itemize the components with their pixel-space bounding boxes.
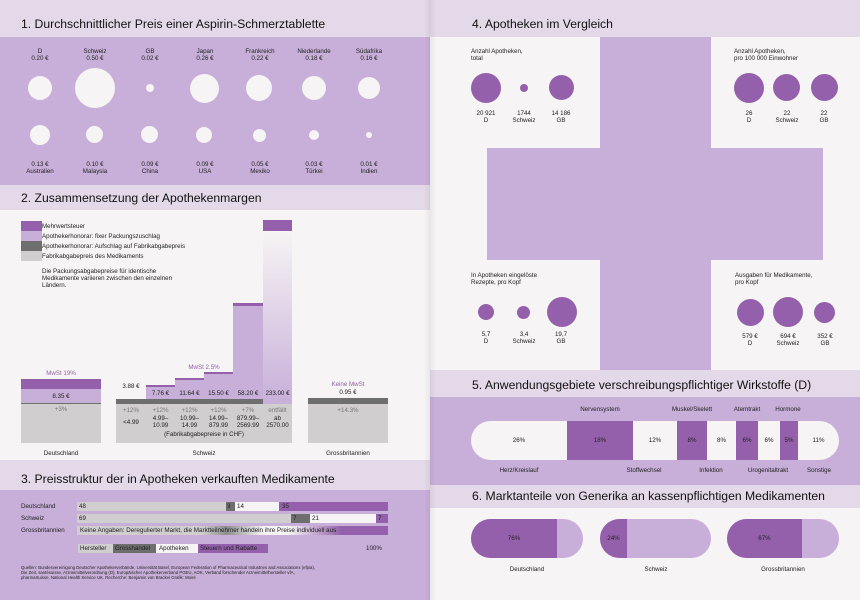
bar: Schweiz: 879.99 [209, 422, 228, 429]
bar: Deutschland: +3% [55, 406, 67, 413]
chart: aspirin prices: 0.05 € [251, 161, 269, 168]
title 3: 3. Preisstruktur der in Apotheken verkauften Medikamente [21, 472, 335, 486]
panel: Rezepte pro Kopf: 5,7 [482, 331, 490, 338]
chart: aspirin prices: 0.09 € [196, 161, 214, 168]
chart: aspirin prices: 0.50 € [86, 55, 104, 62]
bar: Deutschland: 8.35 € [52, 393, 70, 400]
title 2: 2. Zusammensetzung der Apothekenmargen [21, 191, 262, 205]
bar: Schweiz: 14.99 [182, 422, 197, 429]
chart: generics pills: Schweiz [644, 566, 668, 573]
chart: aspirin prices: Schweiz [83, 48, 107, 55]
bar: Schweiz: 4.99– [153, 415, 168, 422]
chart: application areas pill: 18% [594, 437, 606, 444]
chart: price structure: Steuern und Rabatte [200, 545, 257, 552]
panel: Ausgaben pro Kopf: Ausgaben für Medikamente, [735, 272, 812, 279]
chart: aspirin prices: 0.09 € [141, 161, 159, 168]
panel: Rezepte pro Kopf: D [484, 338, 488, 345]
panel: Ausgaben pro Kopf: 579 € [742, 333, 758, 340]
chart: application areas pill: Atemtrakt [734, 406, 760, 413]
bar: Grossbritannien: +14.3% [337, 407, 359, 414]
chart: aspirin prices [26, 48, 382, 175]
bar: Schweiz: 15.50 € [208, 390, 229, 397]
chart: aspirin prices: 0.03 € [305, 161, 323, 168]
bar: Schweiz: 58.20 € [238, 390, 258, 397]
title 1: 1. Durchschnittlicher Preis einer Aspirin-Schmerztablette [21, 17, 325, 31]
panel: Anzahl Apotheken total: GB [557, 117, 565, 124]
chart: aspirin prices: Indien [361, 168, 377, 175]
chart: application areas pill: Hormone [775, 406, 801, 413]
panel: Rezepte pro Kopf: Rezepte, pro Kopf [471, 279, 521, 286]
bar: Schweiz: +12% [210, 407, 226, 414]
bar: Schweiz: (Fabrikabgabepreise in CHF) [164, 431, 244, 438]
chart: aspirin prices: 0.26 € [196, 55, 214, 62]
bar: Schweiz: +12% [123, 407, 139, 414]
chart: price structure: Keine Angaben: Deregulierter Markt, die Marktteilnehmer handeln ihre Preise individuell aus [80, 527, 336, 534]
chart: price structure [21, 502, 388, 553]
chart: aspirin prices: GB [146, 48, 154, 55]
chart: generics pills: Grossbritannien [761, 566, 805, 573]
panel: Rezepte pro Kopf: 19,7 [555, 331, 567, 338]
panel: Rezepte pro Kopf: 3,4 [520, 331, 528, 338]
panel: Ausgaben pro Kopf: D [748, 340, 752, 347]
panel: Ausgaben pro Kopf: GB [821, 340, 829, 347]
title 5: 5. Anwendungsgebiete verschreibungspflichtiger Wirkstoffe (D) [472, 378, 811, 392]
chart: application areas pill: 12% [649, 437, 661, 444]
panel: pro 100000 Einwohner: D [747, 117, 751, 124]
chart: price structure: Schweiz [21, 515, 44, 522]
bar: Grossbritannien: 0.95 € [339, 389, 357, 396]
chart: aspirin prices: Australien [26, 168, 54, 175]
panel: pro 100000 Einwohner: 26 [746, 110, 752, 117]
chart: price structure: 100% [366, 545, 382, 552]
chart: application areas pill: Muskel/Skelett [672, 406, 712, 413]
chart: aspirin prices: Türkei [305, 168, 323, 175]
chart: price structure: Hersteller [80, 545, 106, 552]
chart: price structure: 69 [79, 515, 86, 522]
bar: Schweiz: 10.99 [153, 422, 168, 429]
panel: Rezepte pro Kopf: In Apotheken eingelöste [471, 272, 537, 279]
chart: price structure: Grosshandel [115, 545, 150, 552]
chart: aspirin prices: China [142, 168, 158, 175]
bar: Schweiz: Schweiz [192, 450, 216, 457]
panel: Rezepte pro Kopf: Schweiz [512, 338, 536, 345]
legend: margins: Medikamente variieren zwischen den einzelnen [42, 275, 172, 282]
bar: Grossbritannien: Grossbritannien [326, 450, 370, 457]
panel: Anzahl Apotheken total: Schweiz [512, 117, 536, 124]
chart: price structure: 35 [282, 503, 289, 510]
title 4: 4. Apotheken im Vergleich [472, 17, 613, 31]
chart: aspirin prices: USA [199, 168, 211, 175]
panel: pro 100000 Einwohner: Schweiz [775, 117, 799, 124]
panel: pro 100000 Einwohner: Anzahl Apotheken, [734, 48, 786, 55]
chart: price structure: 48 [79, 503, 86, 510]
chart: application areas pill: Nervensystem [580, 406, 620, 413]
legend: margins: Fabrikabgabepreis des Medikaments [42, 253, 143, 260]
chart: aspirin prices: D [38, 48, 42, 55]
chart: aspirin prices: 0.20 € [31, 55, 49, 62]
bar: Schweiz: MwSt 2.5% [188, 364, 220, 371]
chart: price structure: 14 [237, 503, 244, 510]
bar: Schweiz: +12% [152, 407, 168, 414]
chart: aspirin prices: Mexiko [250, 168, 270, 175]
bar: Schweiz: 233.00 € [265, 390, 290, 397]
chart: generics pills: 24% [607, 535, 620, 542]
bar: Schweiz: 10.99– [180, 415, 199, 422]
bar: Schweiz: entfällt [268, 407, 287, 414]
panel: Rezepte pro Kopf: GB [557, 338, 565, 345]
chart: application areas pill: 8% [688, 437, 696, 444]
legend: margins: Apothekerhonorar: Aufschlag auf Fabrikabgabepreis [42, 243, 185, 250]
legend: margins: Ländern. [42, 282, 66, 289]
bar: Schweiz: 879.99– [237, 415, 259, 422]
sources: pharmaSuisse, National Health Service UK. Recherche: Benjamin von Brackel Grafik: Moiré [21, 575, 196, 580]
panel: Anzahl Apotheken total: 14 186 [552, 110, 570, 117]
sources [21, 565, 315, 580]
panel: Anzahl Apotheken total [471, 48, 574, 124]
bar: Deutschland [21, 370, 101, 457]
chart: aspirin prices: 0.10 € [86, 161, 104, 168]
legend: margins: Die Packungsabgabepreise für identische [42, 268, 156, 275]
sources: Die Zeit, santésuisse, Arzneimittelverordnung (D), Europäischer Apothekerverband PGEU, AOK, Verband forschender Arzneimittelhersteller vfA, [21, 570, 295, 575]
bar: Schweiz: ab [274, 415, 281, 422]
panel: Ausgaben pro Kopf [735, 272, 835, 347]
legend: margins: Apothekerhonorar: fixer Packungszuschlag [42, 233, 160, 240]
legend: margins [21, 221, 185, 289]
chart: generics pills: 67% [758, 535, 771, 542]
chart: aspirin prices: Niederlande [297, 48, 331, 55]
panel: Ausgaben pro Kopf: 694 € [780, 333, 796, 340]
chart: price structure: Apotheken [159, 545, 189, 552]
bar: Schweiz: 14.99– [209, 415, 228, 422]
chart: generics pills: Deutschland [510, 566, 544, 573]
bar: Schweiz: 2569.99 [237, 422, 259, 429]
chart: aspirin prices: 0.22 € [251, 55, 269, 62]
panel: Rezepte pro Kopf [471, 272, 577, 345]
bar: Schweiz: 7.76 € [152, 390, 169, 397]
panel: Ausgaben pro Kopf: pro Kopf [735, 279, 758, 286]
chart: application areas pill: Herz/Kreislauf [500, 467, 538, 474]
chart: application areas pill: 26% [513, 437, 525, 444]
chart: aspirin prices: 0.02 € [141, 55, 159, 62]
chart: application areas pill: 6% [765, 437, 773, 444]
chart: aspirin prices: Malaysia [83, 168, 107, 175]
panel: pro 100000 Einwohner: 22 [821, 110, 827, 117]
panel: pro 100000 Einwohner: 22 [784, 110, 790, 117]
chart: price structure: Deutschland [21, 503, 55, 510]
bar: Deutschland: MwSt 19% [46, 370, 76, 377]
bar: Schweiz [116, 220, 292, 457]
bar: Grossbritannien: Keine MwSt [331, 381, 364, 388]
chart: price structure: 21 [312, 515, 319, 522]
chart: application areas pill: 5% [785, 437, 793, 444]
chart: aspirin prices: 0.13 € [31, 161, 49, 168]
chart: application areas pill: Sonstige [807, 467, 831, 474]
panel: Anzahl Apotheken total: total [471, 55, 483, 62]
legend: margins: Mehrwertsteuer [42, 223, 85, 230]
bar: Deutschland: Deutschland [44, 450, 78, 457]
chart: application areas pill [471, 406, 839, 474]
chart: aspirin prices: 0.16 € [360, 55, 378, 62]
panel: Ausgaben pro Kopf: Schweiz [776, 340, 800, 347]
chart: aspirin prices: Südafrika [356, 48, 382, 55]
chart: aspirin prices: Japan [197, 48, 213, 55]
chart: application areas pill: 6% [743, 437, 751, 444]
chart: aspirin prices: Frankreich [245, 48, 275, 55]
panel: Ausgaben pro Kopf: 352 € [817, 333, 833, 340]
chart: application areas pill: 11% [813, 437, 824, 444]
chart: application areas pill: Stoffwechsel [627, 467, 661, 474]
chart: generics pills: 76% [508, 535, 520, 542]
panel: Anzahl Apotheken total: 20 921 [477, 110, 495, 117]
title 6: 6. Marktanteile von Generika an kassenpflichtigen Medikamenten [472, 489, 825, 503]
bar: Grossbritannien [308, 381, 388, 457]
chart: price structure: 7 [378, 515, 381, 522]
bar: Schweiz: 2570.00 [266, 422, 289, 429]
sources: Quellen: Bundesvereinigung Deutscher Apothekerverbände, Universität Basel, European Federation of Pharmaceutical Industries and Associations (efpia), [21, 565, 315, 570]
chart: application areas pill: Infektion [699, 467, 723, 474]
chart: price structure: 3 [227, 503, 230, 510]
chart: aspirin prices: 0.18 € [305, 55, 323, 62]
panel: Anzahl Apotheken total: Anzahl Apotheken, [471, 48, 523, 55]
panel: pro 100000 Einwohner: pro 100 000 Einwohner [734, 55, 798, 62]
bar: Schweiz: 3.88 € [122, 383, 140, 390]
bar: Schweiz: <4.99 [123, 419, 139, 426]
chart: generics pills [471, 519, 839, 573]
bar: Schweiz: 11.64 € [179, 390, 200, 397]
bar: Schweiz: +12% [182, 407, 198, 414]
panel: pro 100000 Einwohner: GB [820, 117, 828, 124]
chart: price structure: 7 [293, 515, 296, 522]
chart: aspirin prices: 0.01 € [360, 161, 378, 168]
panel: Anzahl Apotheken total: D [484, 117, 488, 124]
bar: Schweiz: +7% [242, 407, 254, 414]
chart: price structure: Grossbritannien [21, 527, 65, 534]
panel: Anzahl Apotheken total: 1744 [517, 110, 531, 117]
cross [487, 37, 823, 370]
chart: application areas pill: Urogenitaltrakt [748, 467, 788, 474]
panel: pro 100000 Einwohner [734, 48, 838, 124]
chart: application areas pill: 8% [717, 437, 726, 444]
